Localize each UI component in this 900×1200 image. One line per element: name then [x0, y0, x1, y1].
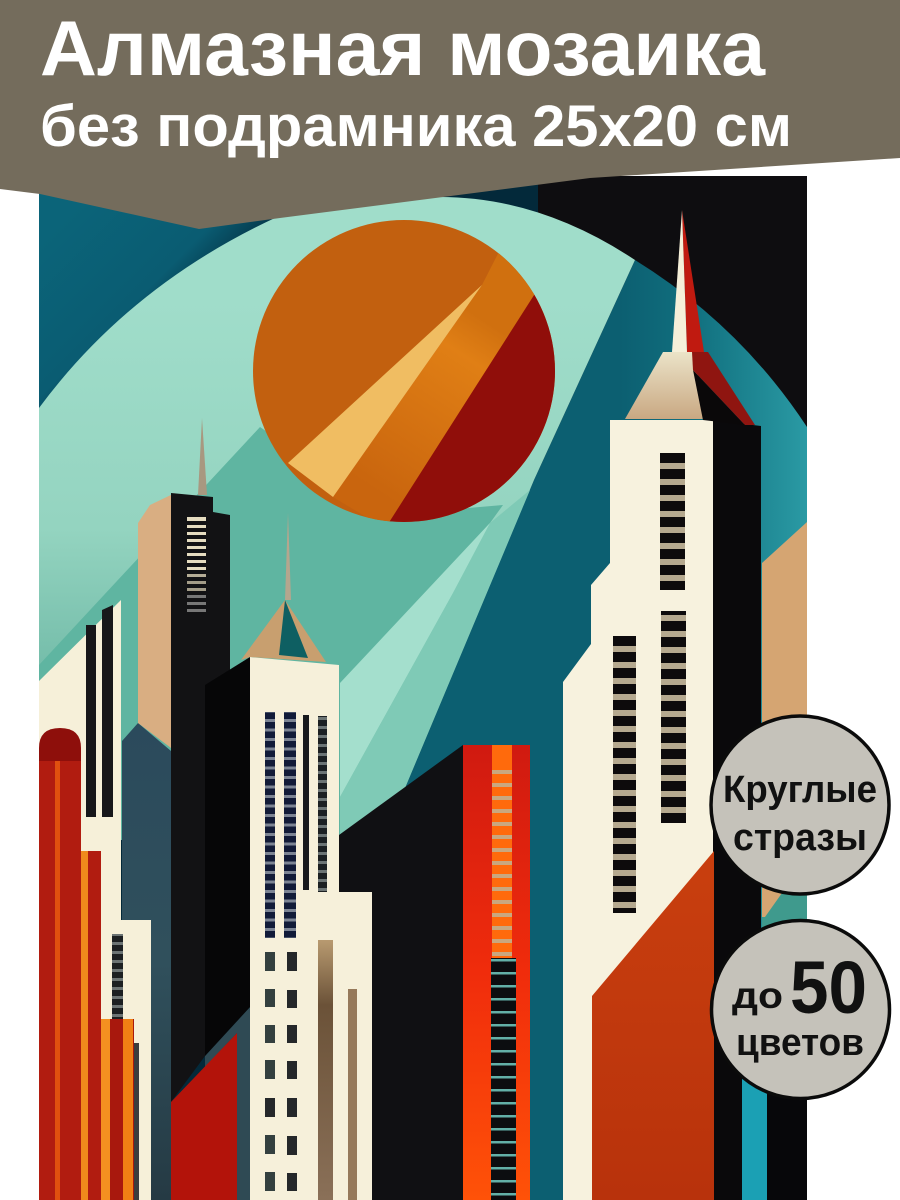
main cream tower [563, 420, 713, 1200]
sky: darker mint shadow [39, 427, 503, 840]
red tower: tan stripes [492, 770, 512, 958]
tall black building [171, 493, 230, 1102]
sun disc [250, 215, 560, 527]
sky: light ray [340, 523, 490, 797]
black tower windows [187, 517, 206, 612]
left cream building [39, 600, 151, 1200]
red tower: orange striped window [492, 745, 512, 958]
title: Алмазная мозаика [40, 4, 766, 92]
central cream building [250, 657, 372, 1200]
roof teal facet [279, 600, 308, 658]
right black column lower [767, 1000, 807, 1200]
sky: dark teal [39, 176, 807, 1200]
sun: orange wedge [354, 253, 546, 522]
tan building [138, 493, 175, 751]
red fin [692, 352, 755, 425]
sky: light mint arc [39, 197, 635, 835]
sky: black corner [538, 176, 807, 476]
subtitle: без подрамника 25х20 см [40, 94, 792, 159]
spire red face [682, 210, 704, 352]
tan spire [198, 418, 207, 495]
central black block [205, 657, 250, 1056]
badge: round rhinestones: стразы [733, 817, 867, 859]
spire cream face [672, 210, 687, 352]
badge: up to 50 colours [712, 920, 890, 1098]
red tower: teal striped window [491, 958, 516, 1200]
badge: round rhinestones: Круглые [723, 769, 877, 811]
central striped windows [265, 712, 327, 938]
sun: cream wedge [288, 285, 482, 497]
badge: up to 50 colours: 50 [790, 946, 867, 1029]
badge: round rhinestones [711, 716, 889, 894]
main black side of tower [712, 420, 761, 1200]
red tower [463, 745, 530, 1200]
central spire [285, 513, 291, 600]
central roof pyramid [241, 600, 326, 662]
sun: dark red wedge [390, 294, 555, 522]
third red tower [101, 1019, 134, 1200]
lower slate sliver [205, 1007, 250, 1200]
right bright teal strip [742, 1000, 767, 1200]
right tan building [762, 522, 807, 917]
left building: black stripes [86, 605, 113, 817]
black building in the centre [339, 745, 463, 1200]
arched red tower [39, 728, 81, 761]
brown vertical bands [318, 940, 357, 1200]
second red tower [81, 851, 101, 1200]
dark narrow strip [134, 1043, 139, 1200]
red triangle roof block [171, 1033, 237, 1200]
square windows [265, 952, 297, 1191]
main tower striped windows [613, 453, 686, 913]
striped dark window [112, 934, 123, 1019]
sun [250, 215, 565, 535]
shadow under red fin [693, 370, 745, 425]
badge: up to 50 colours: до [732, 975, 783, 1016]
right green patch [762, 890, 807, 1000]
sky: teal arc on the right [340, 260, 807, 1200]
slate building [122, 723, 171, 1200]
badge: up to 50 colours: цветов [736, 1022, 864, 1064]
header banner [0, 0, 900, 229]
painting: art deco city [39, 176, 807, 1200]
sky: medium ray [340, 490, 530, 835]
main tower roof [625, 352, 703, 419]
red buildings at far left [39, 728, 139, 1200]
main tower red-orange block [592, 851, 714, 1200]
